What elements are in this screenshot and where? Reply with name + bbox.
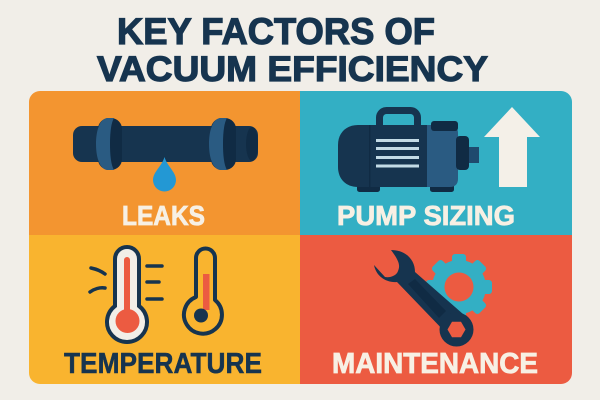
icon: gear (426, 254, 492, 320)
panel: pump sizing (300, 91, 572, 235)
title: KEY FACTORS OF (117, 11, 435, 52)
panel: leaks (29, 91, 300, 235)
label: temperature: TEMPERATURE (64, 348, 262, 380)
label: leaks: LEAKS (122, 200, 205, 231)
label: maintenance: MAINTENANCE (332, 348, 538, 380)
icon: water drop (153, 157, 176, 192)
icon: hot thermometer (90, 247, 162, 342)
title (97, 11, 488, 89)
panel: temperature (29, 235, 300, 384)
icon: leaking pipe (73, 118, 258, 192)
title: VACUUM EFFICIENCY (97, 50, 488, 89)
icon: gauge thermometer (184, 248, 222, 334)
icon: pump (338, 110, 479, 192)
label: pump sizing: PUMP SIZING (337, 200, 515, 231)
panel: maintenance (300, 235, 572, 384)
icon: up arrow (484, 107, 540, 187)
icon: wrench (374, 250, 474, 346)
